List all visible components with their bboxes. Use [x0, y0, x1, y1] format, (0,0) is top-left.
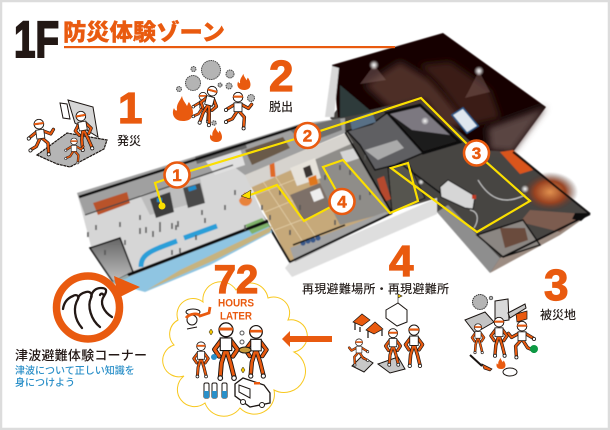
ceiling spotlights	[369, 60, 379, 70]
icon: escape through smoke and fire	[173, 60, 254, 142]
outer right wall	[513, 152, 590, 214]
evacuation route: yellow line	[155, 98, 530, 232]
route marker 1: 1	[172, 166, 182, 185]
step 1 heading: 1	[118, 84, 142, 133]
photo wall	[377, 176, 391, 202]
upper room strip	[77, 118, 345, 215]
crowd of visitors	[88, 155, 370, 255]
exterior wall lower right face	[490, 214, 590, 273]
title underline	[64, 46, 395, 48]
title: 防災体験ゾーン	[63, 19, 225, 45]
step 2 heading: 脱出	[269, 99, 293, 114]
fire-damaged room	[500, 150, 533, 174]
central gallery room	[387, 105, 460, 153]
step 2 heading: 2	[269, 52, 293, 101]
back wall	[245, 133, 353, 188]
72 hours later heading: 72	[214, 258, 258, 302]
exhibit door units	[150, 192, 174, 218]
step 4 heading	[302, 237, 449, 296]
72 hours later heading: HOURS	[218, 298, 254, 310]
video screen	[452, 108, 478, 133]
route marker 4	[330, 189, 354, 214]
tsunami corner description: 身につけよう	[15, 376, 75, 389]
tsunami corner title: 津波避難体験コーナー	[15, 348, 147, 363]
arrow to 72 hours	[282, 331, 332, 347]
route marker 4: 4	[337, 192, 347, 212]
step 3 heading: 被災地	[540, 307, 576, 322]
lower corridor with seats	[290, 212, 392, 262]
icon: disaster area	[465, 294, 538, 376]
left wing floor	[77, 145, 267, 285]
white partition block	[440, 180, 475, 209]
dark ceiling room	[332, 33, 546, 152]
blue guide arrow floor	[141, 226, 217, 267]
tsunami corner badge	[56, 276, 140, 339]
step 3 heading: 3	[544, 261, 568, 310]
central platform	[290, 183, 332, 220]
tsunami black wall	[128, 221, 268, 275]
right wing floor	[330, 92, 590, 272]
exterior wall mid wing	[285, 198, 437, 277]
step 1 heading: 発災	[117, 134, 141, 148]
floor guide lines	[470, 180, 525, 228]
icon: waves	[63, 288, 112, 328]
72 hours later heading: LATER	[220, 310, 252, 322]
route marker 1	[164, 162, 190, 188]
route marker 3: 3	[472, 144, 481, 163]
rear black wall	[79, 126, 300, 197]
floor label 1F: 1F	[14, 11, 59, 68]
disaster area floor room	[477, 220, 540, 257]
floor plan model	[77, 33, 590, 292]
exterior wall lower left face	[437, 205, 500, 273]
exhibit booth	[290, 158, 321, 186]
step 4 heading: 4	[389, 237, 414, 286]
route marker 2	[295, 123, 320, 148]
grey right floor	[312, 133, 390, 225]
icon: earthquake	[25, 100, 107, 167]
mid rooms	[347, 113, 423, 170]
tsunami corner description: 津波について正しい知識を	[15, 364, 135, 377]
tsunami strip	[113, 222, 272, 292]
orange balloon marker	[239, 192, 252, 206]
route marker 3	[464, 140, 489, 166]
step 3 heading	[540, 261, 576, 322]
bottom-left room	[90, 238, 133, 282]
route marker 2: 2	[303, 126, 312, 146]
mid wing floor wood	[245, 133, 390, 262]
icon: evacuation centre	[349, 294, 422, 373]
cloud outline	[163, 282, 307, 416]
tsunami corner description	[15, 364, 135, 389]
72 hours later heading	[214, 258, 258, 322]
step 4 heading: 再現避難場所・再現避難所	[302, 281, 449, 296]
corridor room	[388, 162, 425, 212]
icon: rescue after 72 hours	[186, 307, 270, 408]
mid wing walls	[233, 132, 392, 262]
